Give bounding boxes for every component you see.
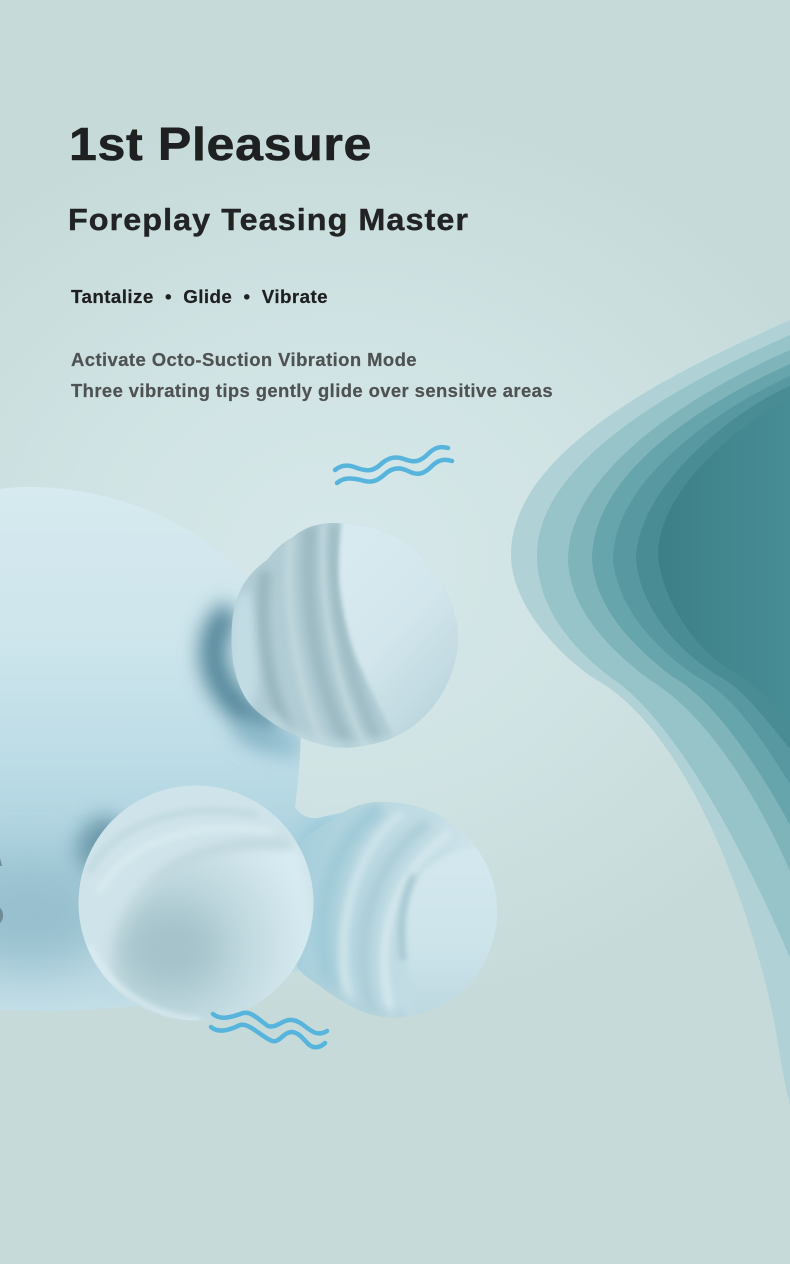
description line 2: Three vibrating tips gently glide over sensitive areas <box>71 381 553 401</box>
title: 1st Pleasure <box>69 118 372 170</box>
device body <box>0 487 357 1011</box>
cap <box>336 524 458 736</box>
vibration waves top <box>335 447 452 483</box>
keywords: Tantalize • Glide • Vibrate <box>71 287 328 307</box>
edge marks <box>0 858 3 923</box>
lower right vibrating tip <box>297 802 510 1020</box>
upper vibrating tip <box>232 523 458 748</box>
layered teal wave <box>511 320 790 1105</box>
neck shadow upper <box>213 612 275 728</box>
cap <box>407 854 485 1010</box>
description line 1: Activate Octo-Suction Vibration Mode <box>71 350 417 370</box>
vibration waves bottom <box>211 1013 327 1047</box>
cap <box>122 854 310 1020</box>
neck shadow lower <box>66 807 122 874</box>
lower left vibrating tip <box>78 786 314 1020</box>
bridge to third tip <box>297 816 334 846</box>
subtitle: Foreplay Teasing Master <box>68 202 469 237</box>
